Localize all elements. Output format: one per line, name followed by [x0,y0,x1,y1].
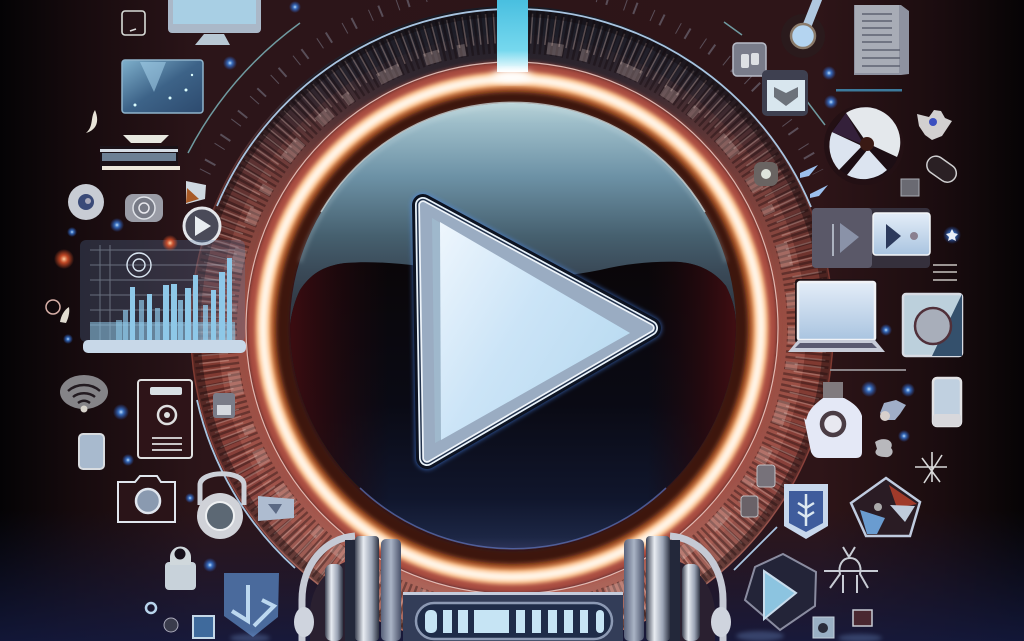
right ear cup [624,536,731,641]
icon: hexagon play [745,554,816,630]
icon: orange star [54,249,74,269]
icon: camera [118,476,175,522]
glowing ring [246,62,778,594]
icon: camera badge [125,194,163,222]
icon: small server tile [213,393,235,418]
icon: shield left [224,573,279,637]
icon: lever [781,0,825,58]
icon: shield right [784,484,828,539]
icon: padlock [165,546,196,590]
icon: bug [824,547,878,593]
headphones [294,536,731,641]
play triangle [423,205,650,458]
icon: lock ring [197,474,244,539]
icon: document card [138,380,192,458]
blue divider line [836,89,902,92]
icon: small bottom tiles [813,610,872,638]
icon: small tiles right [741,465,775,517]
bar chart [90,258,235,341]
divider line [830,369,906,371]
icon: photo panel [122,60,203,113]
icon: tiny tiles bottom left [146,603,214,638]
icon: round tile [754,162,778,186]
left ear cup [294,536,401,641]
central disk [290,102,736,549]
icon: phone right [933,378,961,426]
sparkles [63,1,915,572]
icon: square camera [903,294,962,356]
icon: bottle [804,382,862,458]
icon: split tile [733,43,766,76]
icon: laptop [788,279,885,352]
icon: play button small [184,208,220,244]
icon: small square [901,179,919,196]
icon: small tablet [122,11,145,35]
progress bar [403,592,623,641]
icon: gear [68,184,104,220]
floor sparkle [230,631,882,641]
icon: monitor [168,0,261,45]
icon: crescent [86,110,97,133]
icon: phone [79,434,104,469]
icon: heart tile [762,70,808,116]
icon: pentagon [851,478,920,536]
chart icon [127,253,151,277]
chart panel [80,240,246,353]
light beam [492,0,532,82]
icon: notebook [854,5,909,75]
icon: disc [824,105,904,185]
chart tray [83,340,246,353]
icon: capsule [923,153,960,186]
icon: small tile [186,181,206,204]
icon: arrows [800,165,828,198]
icon: menu lines [933,265,957,280]
icon: blobs [875,400,906,457]
icon: play panel [812,208,930,268]
icon: stacked books [100,135,180,170]
ticked dial band [188,0,828,641]
icon: puzzle [917,110,952,140]
icon: bow [915,452,947,483]
icon: blue star [943,226,961,244]
icon: small logo [46,300,69,323]
icon: tile [258,496,294,521]
icon: wifi [60,375,108,412]
